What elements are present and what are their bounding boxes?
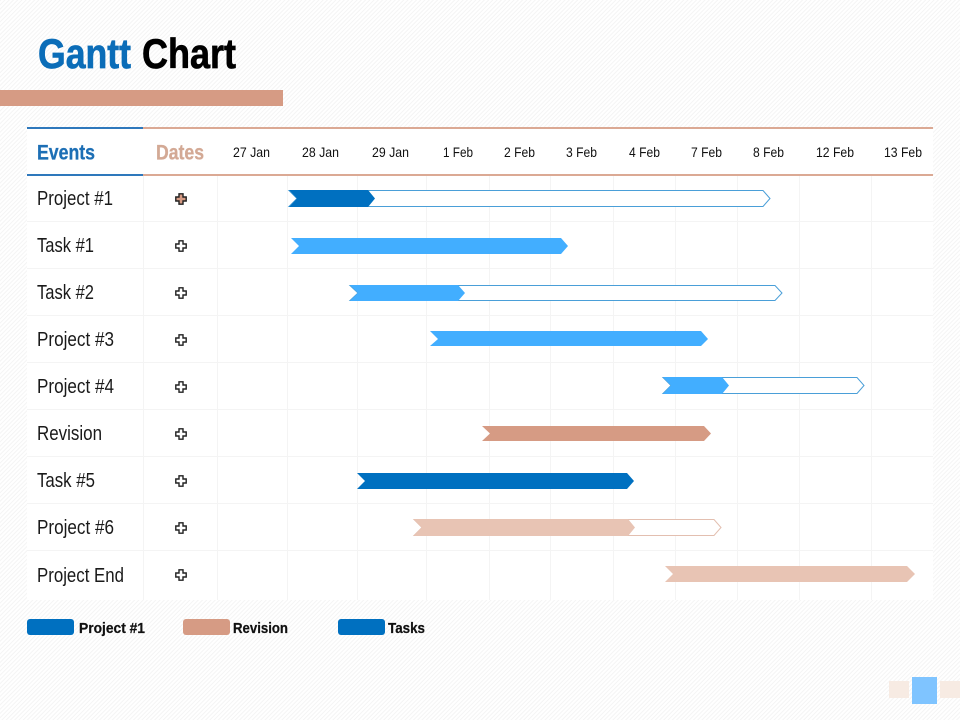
- date axis labels: 1 Feb: [443, 144, 473, 160]
- event row labels: Project #1: [37, 188, 113, 210]
- legend: tasks: Tasks: [388, 620, 425, 637]
- event row labels: Project #3: [37, 329, 114, 351]
- date axis labels: 8 Feb: [753, 144, 784, 160]
- header: events: Events: [37, 142, 95, 164]
- bar: task #5: [357, 473, 634, 489]
- legend: revision: [183, 619, 288, 637]
- legend: project #1: Project #1: [79, 620, 145, 637]
- event row labels: Task #2: [37, 282, 94, 304]
- date axis labels: 7 Feb: [691, 144, 722, 160]
- bar: project #6: [414, 519, 721, 536]
- event row labels: Project #4: [37, 376, 114, 398]
- event row labels: Revision: [37, 423, 102, 445]
- date axis labels: 29 Jan: [372, 144, 409, 160]
- date axis labels: 3 Feb: [566, 144, 597, 160]
- bar: project end: [665, 566, 915, 582]
- title: Gantt: [38, 30, 131, 77]
- event row labels: [37, 188, 124, 587]
- date axis labels: [233, 144, 922, 160]
- bar: task #1: [291, 238, 568, 254]
- bar: revision: [482, 426, 711, 441]
- event row labels: Project End: [37, 565, 124, 587]
- event row labels: Task #5: [37, 470, 95, 492]
- date axis labels: 4 Feb: [629, 144, 660, 160]
- bar: project #1: [289, 190, 770, 207]
- legend: revision: Revision: [233, 620, 288, 637]
- title: [38, 30, 236, 77]
- title accent bar: [0, 90, 283, 106]
- legend: tasks: [338, 619, 425, 637]
- event row labels: Project #6: [37, 517, 114, 539]
- event row labels: Task #1: [37, 235, 94, 257]
- date axis labels: 27 Jan: [233, 144, 270, 160]
- header: dates: Dates: [156, 142, 204, 164]
- date axis labels: 2 Feb: [504, 144, 535, 160]
- legend: project #1: [27, 619, 145, 637]
- decorative corner squares: [889, 677, 960, 704]
- bar: project #4: [663, 377, 864, 394]
- legend: [27, 619, 425, 637]
- panel: gantt table: [27, 127, 933, 600]
- bar: task #2: [350, 285, 782, 301]
- date axis labels: 13 Feb: [884, 144, 922, 160]
- title: Chart: [142, 30, 236, 77]
- date axis labels: 28 Jan: [302, 144, 339, 160]
- bar: project #3: [430, 331, 708, 346]
- date axis labels: 12 Feb: [816, 144, 854, 160]
- plus icons: [176, 194, 186, 580]
